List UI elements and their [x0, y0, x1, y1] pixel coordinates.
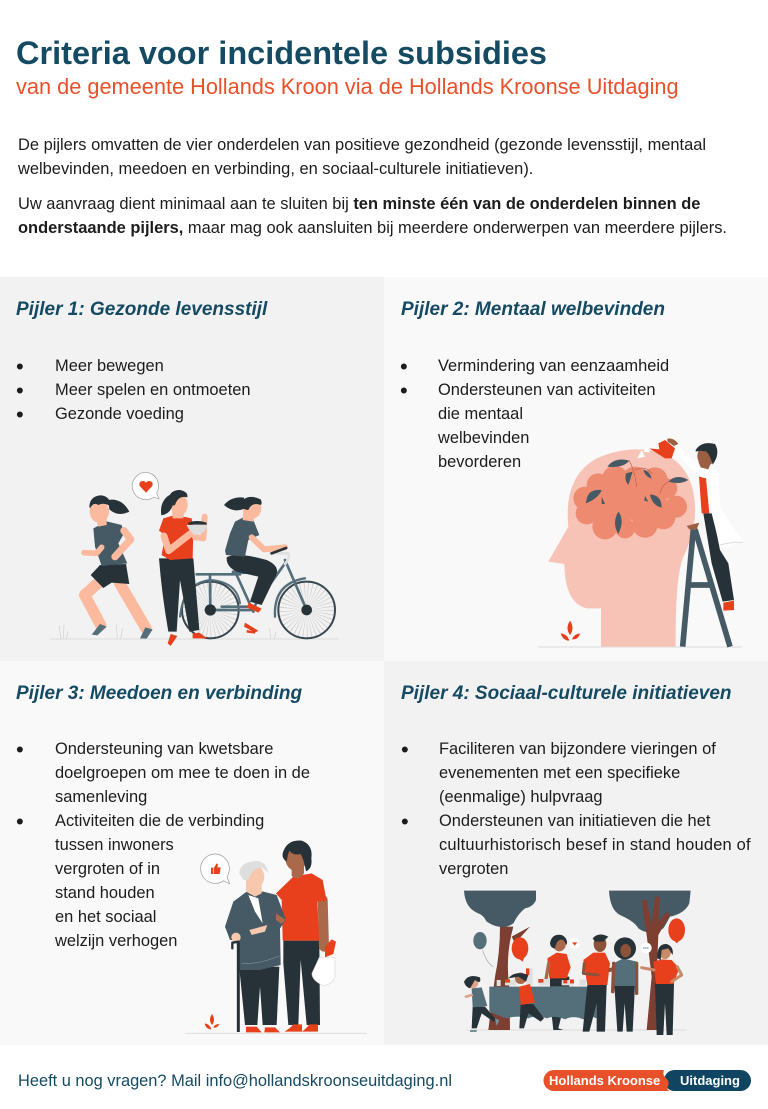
- panel: pijler 3: [0, 661, 384, 1045]
- bullets: pijler 1: •: [16, 354, 24, 379]
- list: pijler 4: cultuurhistorisch besef in stand houden of: [439, 836, 751, 854]
- intro paragraph 2: Uw aanvraag dient minimaal aan te sluiten bij ten minste één van de onderdelen binnen de: [18, 195, 700, 213]
- bullets: pijler 4: [401, 737, 409, 834]
- shopping bag: [312, 939, 336, 986]
- cyclist: [224, 497, 286, 634]
- list: pijler 2: Ondersteunen van activiteiten: [438, 381, 655, 399]
- list: pijler 3: welzijn verhogen: [55, 932, 177, 950]
- tree right: [609, 891, 691, 1030]
- tree left: [464, 891, 536, 1030]
- panel: pijler 4: [384, 661, 768, 1045]
- bicycle: [180, 553, 335, 638]
- head: [548, 449, 695, 647]
- panel: pijler 1: [0, 277, 384, 661]
- list: pijler 3: en het sociaal: [55, 908, 156, 926]
- elderly woman: [225, 861, 286, 1032]
- balloons: [473, 918, 685, 967]
- intro paragraph 2: onderstaande pijlers, maar mag ook aansluiten bij meerdere onderwerpen van meerdere pijlers.: [18, 219, 727, 237]
- heading: pijler 4: Pijler 4: Sociaal-culturele initiatieven: [401, 683, 732, 704]
- list: pijler 1: Meer spelen en ontmoeten: [55, 381, 251, 399]
- list: pijler 3: vergroten of in: [55, 860, 160, 878]
- bullets: pijler 3: •: [16, 809, 24, 834]
- young man: [276, 841, 327, 1032]
- list: pijler 3: samenleving: [55, 788, 147, 806]
- bullets: pijler 2: •: [400, 354, 408, 379]
- bullets: pijler 2: •: [400, 378, 408, 403]
- list: pijler 4: [439, 740, 751, 878]
- heading: pijler 1: Pijler 1: Gezonde levensstijl: [16, 299, 267, 320]
- list: pijler 4: (eenmalige) hulpvraag: [439, 788, 603, 806]
- bullets: pijler 1: [16, 354, 24, 427]
- logo: Hollands Kroonse Uitdaging: [544, 1070, 751, 1091]
- plant: [205, 1014, 219, 1029]
- bullets: pijler 4: •: [401, 809, 409, 834]
- table: [489, 968, 597, 1019]
- list: pijler 1: [55, 357, 251, 423]
- list: pijler 4: Ondersteunen van initiatieven die het: [439, 812, 710, 830]
- list: pijler 1: Meer bewegen: [55, 357, 164, 375]
- list: pijler 2: Vermindering van eenzaamheid: [438, 357, 669, 375]
- bullets: pijler 1: •: [16, 402, 24, 427]
- leaves: [586, 460, 688, 534]
- illustration: neighbourhood celebration: [464, 891, 691, 1035]
- subtitle: van de gemeente Hollands Kroon via de Hollands Kroonse Uitdaging: [16, 74, 679, 99]
- scientist: [675, 443, 743, 611]
- list: pijler 3: Activiteiten die de verbinding: [55, 812, 264, 830]
- intro paragraph 2: [18, 195, 727, 237]
- speech bubble: thumbs up: [201, 854, 230, 884]
- list: pijler 3: doelgroepen om mee te doen in de: [55, 764, 310, 782]
- adults: [583, 935, 682, 1035]
- list: pijler 4: evenementen met een specifieke: [439, 764, 680, 782]
- woman with bowl: [159, 490, 207, 646]
- list: pijler 2: welbevinden: [438, 429, 529, 447]
- intro paragraph 1: De pijlers omvatten de vier onderdelen van positieve gezondheid (gezonde levensstijl, mentaal: [18, 136, 706, 154]
- illustration: young man and elderly woman: [185, 841, 367, 1033]
- bullets: pijler 1: •: [16, 378, 24, 403]
- bullets: pijler 3: [16, 737, 24, 834]
- illustration: watering the brain: [538, 438, 743, 647]
- footer contact line: Heeft u nog vragen? Mail info@hollandskroonseuitdaging.nl: [18, 1072, 452, 1090]
- runner: [84, 495, 153, 639]
- table person: [546, 935, 580, 1030]
- panel: pijler 2: [384, 277, 768, 661]
- bullets: pijler 2: [400, 354, 408, 403]
- heading: pijler 3: Pijler 3: Meedoen en verbinding: [16, 683, 302, 704]
- list: pijler 2: bevorderen: [438, 453, 521, 471]
- intro paragraph 1: [18, 136, 706, 178]
- list: pijler 3: stand houden: [55, 884, 155, 902]
- title: Criteria voor incidentele subsidies: [16, 35, 547, 71]
- logo: Hollands Kroonse Uitdaging: Hollands Kroonse: [549, 1073, 660, 1088]
- logo: Hollands Kroonse Uitdaging: Uitdaging: [680, 1073, 740, 1088]
- intro paragraph 1: welbevinden, meedoen en verbinding, en sociaal-culturele initiatieven).: [18, 160, 533, 178]
- list: pijler 1: Gezonde voeding: [55, 405, 184, 423]
- ladder: [683, 529, 730, 647]
- watering can: [649, 438, 678, 458]
- heading: pijler 2: Pijler 2: Mentaal welbevinden: [401, 299, 665, 320]
- speech bubble: heart: [132, 472, 159, 500]
- list: pijler 4: vergroten: [439, 860, 508, 878]
- children: [464, 973, 544, 1032]
- list: pijler 2: [438, 357, 669, 471]
- list: pijler 3: Ondersteuning van kwetsbare: [55, 740, 273, 758]
- plant: [561, 621, 580, 641]
- brain: [573, 466, 687, 539]
- list: pijler 2: die mentaal: [438, 405, 523, 423]
- list: pijler 4: Faciliteren van bijzondere vieringen of: [439, 740, 716, 758]
- bullets: pijler 3: •: [16, 737, 24, 762]
- illustration: running, eating and cycling women: [50, 472, 338, 646]
- list: pijler 3: [55, 740, 310, 950]
- bullets: pijler 4: •: [401, 737, 409, 762]
- list: pijler 3: tussen inwoners: [55, 836, 174, 854]
- water drops: [637, 447, 650, 458]
